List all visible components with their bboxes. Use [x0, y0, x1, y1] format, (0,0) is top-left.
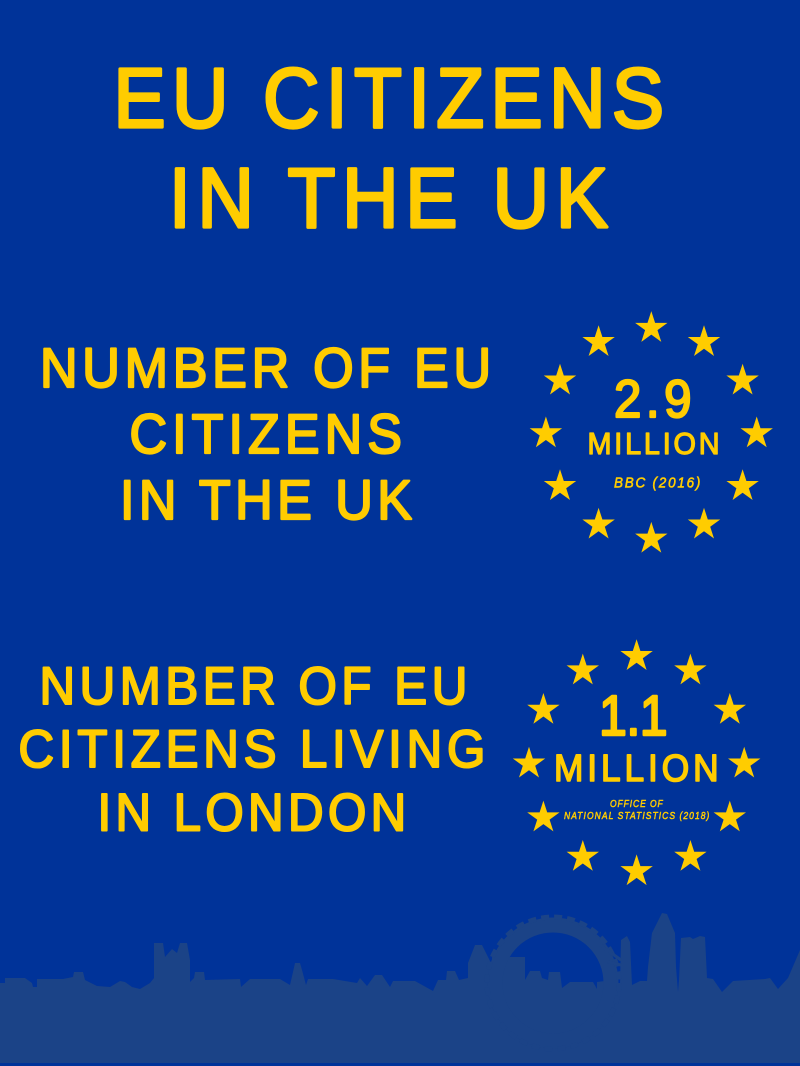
- heading: number of EU citizens in the UK: CITIZENS: [130, 403, 402, 465]
- heading: number of EU citizens living in London: CITIZENS LIVING: [18, 719, 485, 778]
- title: IN THE UK: [169, 153, 608, 246]
- icon: ring of twelve stars: [513, 639, 760, 885]
- heading: number of EU citizens in the UK: IN THE UK: [120, 469, 412, 531]
- unit: MILLION: [554, 747, 719, 789]
- heading: number of EU citizens living in London: IN LONDON: [98, 783, 406, 842]
- source: BBC (2016): [614, 475, 700, 492]
- skyline: London silhouette: [0, 913, 800, 1063]
- source: [564, 798, 709, 821]
- stat: 1.1 million: [513, 639, 760, 885]
- unit: MILLION: [588, 427, 720, 461]
- stat: 2.9 million: [530, 311, 773, 553]
- number: 1.1: [599, 684, 668, 748]
- title: [114, 53, 664, 246]
- heading: number of EU citizens in the UK: [40, 337, 491, 531]
- title: EU CITIZENS: [114, 53, 664, 146]
- number: 2.9: [614, 369, 692, 428]
- source: NATIONAL STATISTICS (2018): [564, 810, 709, 821]
- icon: ring of twelve stars: [530, 311, 773, 553]
- heading: number of EU citizens in the UK: NUMBER OF EU: [40, 337, 491, 399]
- heading: number of EU citizens living in London: [18, 656, 485, 842]
- heading: number of EU citizens living in London: NUMBER OF EU: [40, 656, 467, 715]
- source: OFFICE OF: [610, 798, 664, 809]
